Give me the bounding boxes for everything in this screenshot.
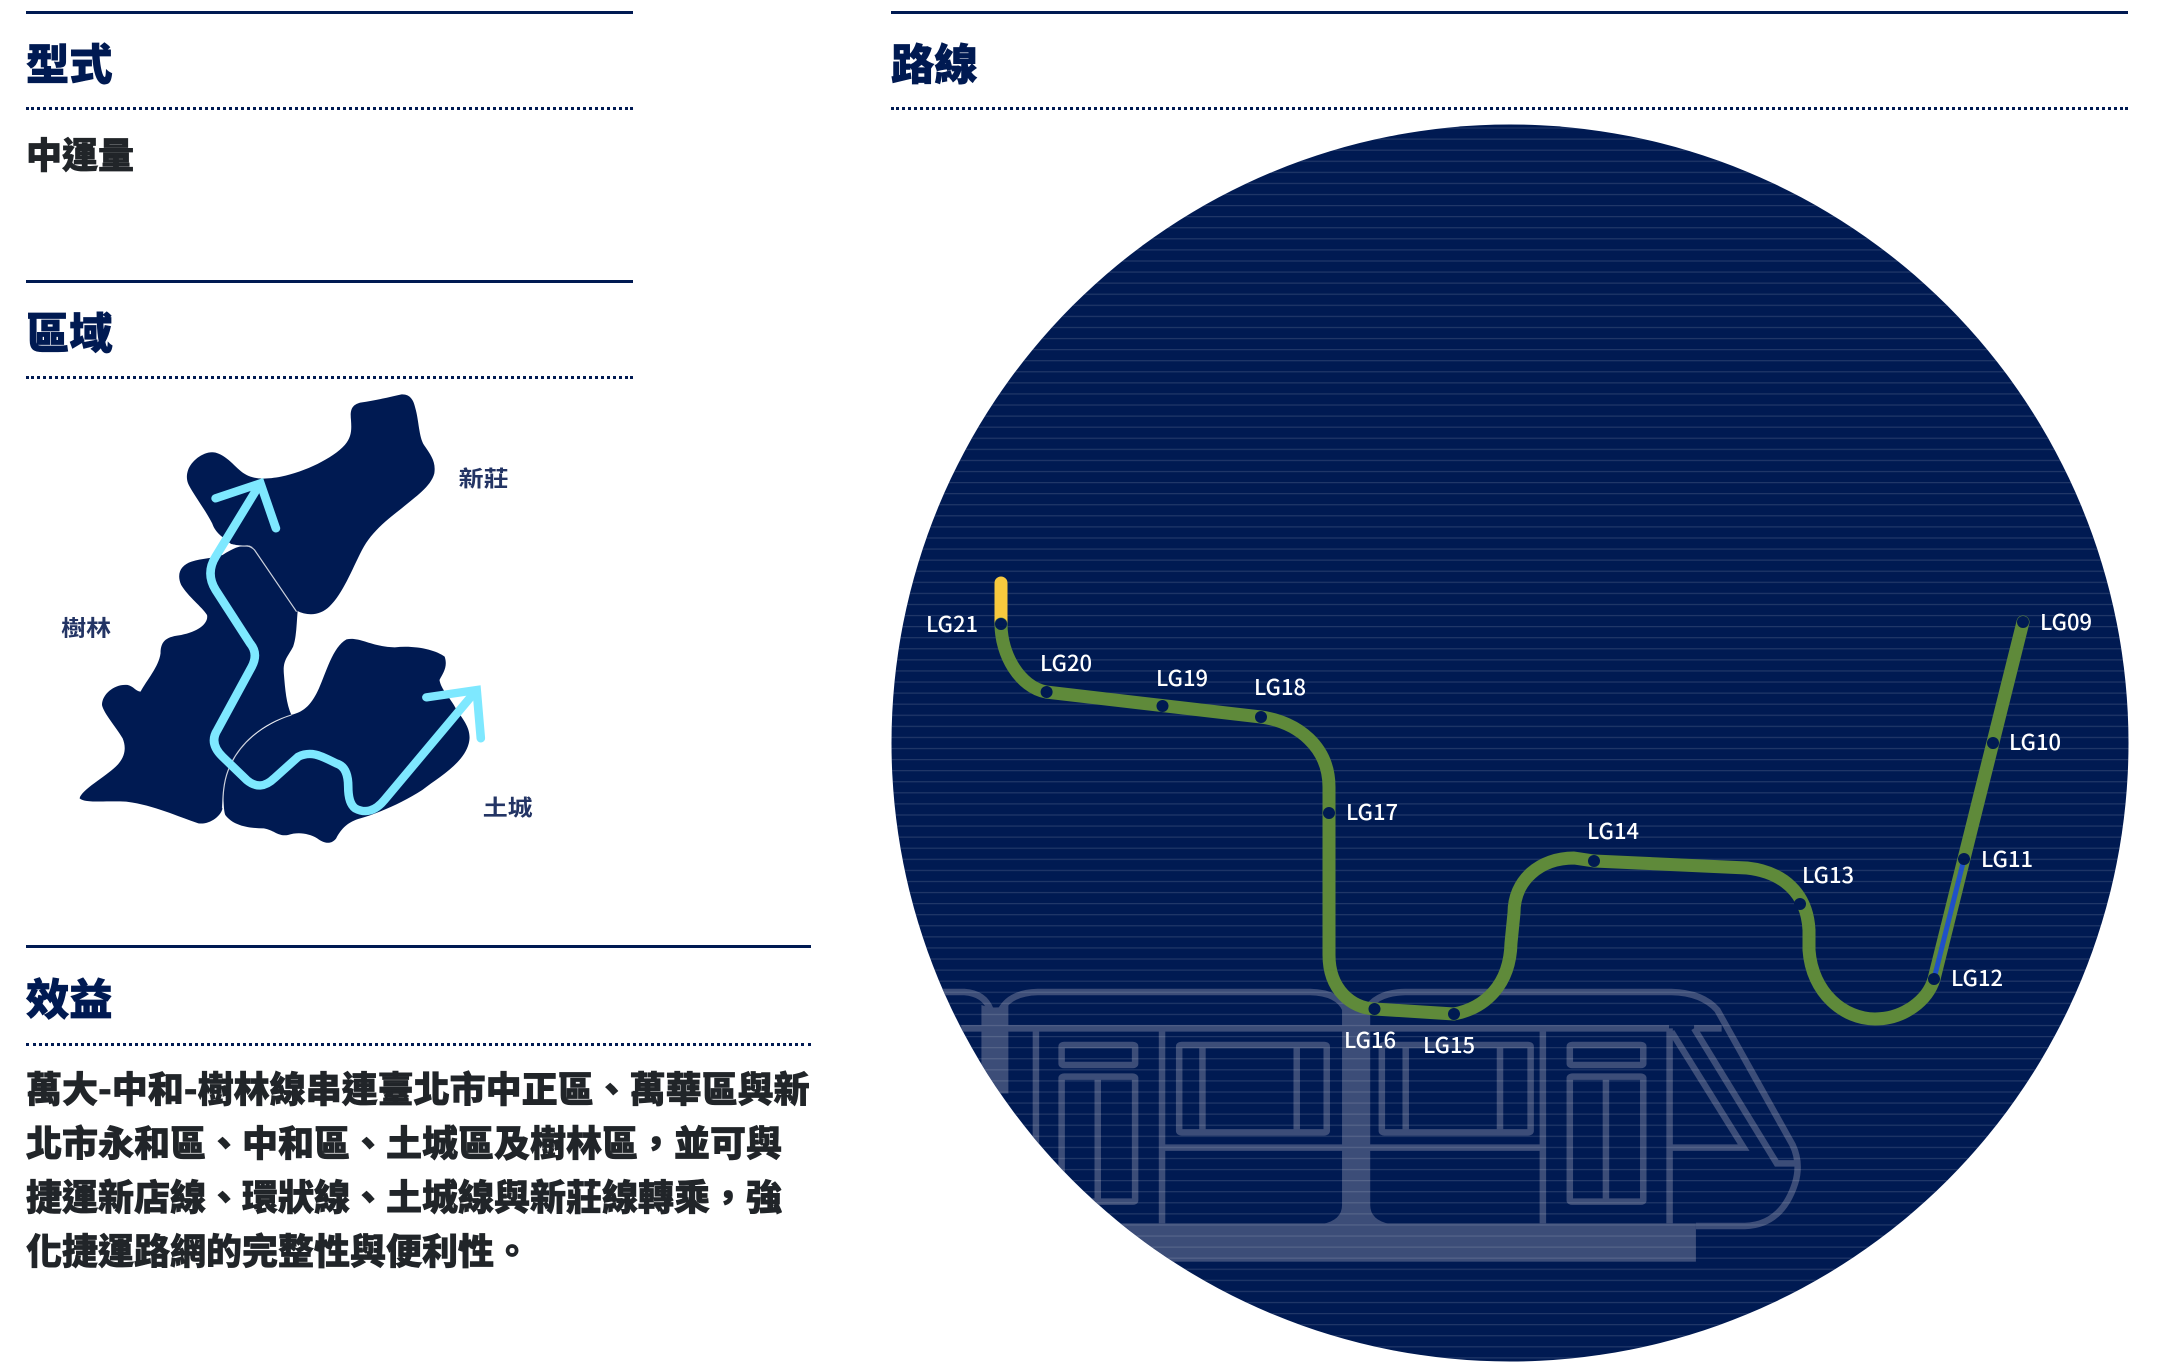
- station labels: LG21: [926, 607, 978, 639]
- heading: type: 型式: [26, 31, 113, 93]
- station labels: LG13: [1802, 858, 1854, 890]
- station labels: LG15: [1423, 1028, 1475, 1060]
- station labels: [926, 605, 2092, 1060]
- text: type value: 中運量: [26, 126, 134, 178]
- map area: Xinzhuang: [187, 394, 435, 614]
- route diagram: [892, 124, 2128, 1362]
- text: benefits body: [26, 1060, 810, 1275]
- line: blue segment: [1934, 859, 1964, 979]
- panel: route: [891, 11, 2128, 1362]
- heading: region: 區域: [26, 300, 113, 362]
- station labels: LG16: [1344, 1023, 1396, 1055]
- line: yellow segment: [994, 583, 1008, 624]
- stations: [995, 616, 2029, 1020]
- heading: benefits: 效益: [26, 966, 113, 1028]
- line: green route: [1001, 622, 2023, 1019]
- station labels: LG18: [1254, 670, 1306, 702]
- heading: route: 路線: [891, 31, 978, 93]
- panel: benefits: [26, 945, 811, 1275]
- station labels: LG19: [1156, 661, 1208, 693]
- station labels: LG10: [2009, 725, 2061, 757]
- station labels: LG14: [1587, 814, 1639, 846]
- station labels: LG12: [1951, 961, 2003, 993]
- region map: [61, 394, 533, 843]
- circle background: [892, 124, 2128, 1362]
- label: Xinzhuang: 新莊: [459, 462, 509, 494]
- station labels: LG11: [1981, 842, 2033, 874]
- text: benefits body: 萬大-中和-樹林線串連臺北市中正區、萬華區與新: [26, 1060, 810, 1112]
- train silhouette: [900, 992, 1798, 1262]
- boundary lines: [223, 545, 297, 808]
- label: Shulin: 樹林: [61, 611, 111, 643]
- label: Tucheng: 土城: [483, 791, 533, 822]
- station labels: LG09: [2040, 605, 2092, 637]
- text: benefits body: 捷運新店線、環狀線、土城線與新莊線轉乘，強: [26, 1169, 782, 1221]
- arrow: route through districts: [210, 483, 481, 811]
- station labels: LG20: [1040, 646, 1092, 678]
- text: benefits body: 化捷運路網的完整性與便利性。: [26, 1223, 530, 1275]
- panel: region: [26, 280, 633, 843]
- map area: Shulin: [80, 546, 298, 824]
- text: benefits body: 北市永和區、中和區、土城區及樹林區，並可與: [26, 1115, 782, 1167]
- horizontal stripes: [892, 124, 2128, 1362]
- station labels: LG17: [1346, 795, 1398, 827]
- map area: Tucheng: [224, 639, 470, 843]
- panel: type: [26, 11, 633, 178]
